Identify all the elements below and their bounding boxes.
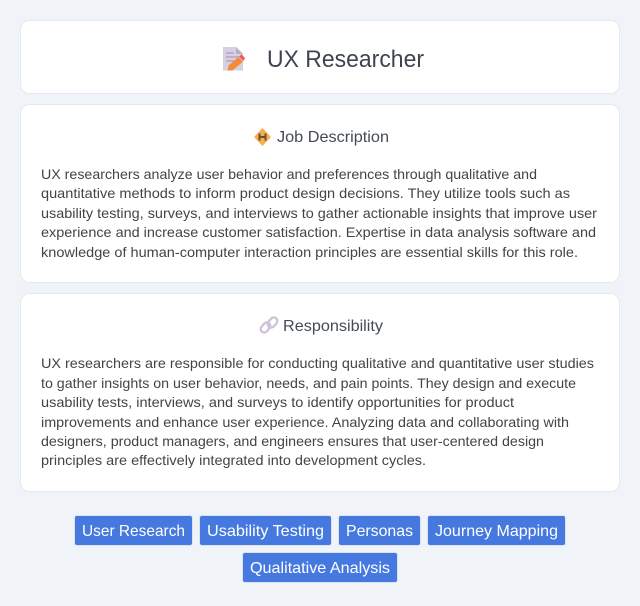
tag: Journey Mapping: Journey Mapping	[435, 523, 558, 540]
text block: job description: knowledge of human-computer interaction principles are essential skills for this role.	[41, 244, 578, 260]
text block: responsibility: improvements and enhance user experience. Analyzing data and collaborating with	[41, 414, 569, 430]
tag: Journey Mapping	[428, 516, 566, 546]
text block: job description: UX researchers analyze user behavior and preferences through qualitative and	[41, 166, 537, 182]
text block: responsibility	[41, 355, 594, 468]
text block: responsibility: UX researchers are responsible for conducting qualitative and quantitative user studies	[41, 355, 594, 371]
heading: responsibility: Responsibility	[283, 318, 383, 335]
title: UX Researcher	[267, 46, 424, 73]
tag: Usability Testing: Usability Testing	[207, 523, 324, 540]
tag: Qualitative Analysis	[242, 552, 398, 582]
heading: job description: Job Description	[277, 129, 389, 146]
text block: job description: usability testing, surveys, and interviews to gather actionable insights that improve user	[41, 205, 597, 221]
text block: job description: experience and increase customer satisfaction. Expertise in data analysis software and	[41, 224, 596, 240]
tag: Personas	[338, 516, 420, 546]
text block: responsibility: to gather insights on user behavior, needs, and pain points. They design and execute	[41, 375, 576, 391]
tag: User Research	[74, 516, 192, 546]
icon: document with pencil	[223, 47, 245, 70]
tag: Usability Testing	[200, 516, 332, 546]
text block: responsibility: usability tests, interviews, and surveys to identify opportunities for product	[41, 394, 514, 410]
panel: responsibility	[20, 294, 620, 492]
tag: User Research: User Research	[82, 523, 185, 540]
text block: responsibility: principles are effectively integrated into development cycles.	[41, 452, 426, 468]
text block: responsibility: designers, product managers, and engineers ensures that user-centered design	[41, 433, 544, 449]
icon: chain link	[259, 316, 279, 334]
text block: job description	[41, 166, 597, 260]
icon: orange diamond	[254, 128, 271, 146]
tag: Personas: Personas	[346, 523, 413, 540]
panel: title card	[20, 20, 620, 94]
tag: Qualitative Analysis: Qualitative Analysis	[250, 560, 390, 577]
panel: job description	[20, 104, 620, 282]
text block: job description: quantitative methods to inform product design decisions. They utilize tools such as	[41, 185, 570, 201]
